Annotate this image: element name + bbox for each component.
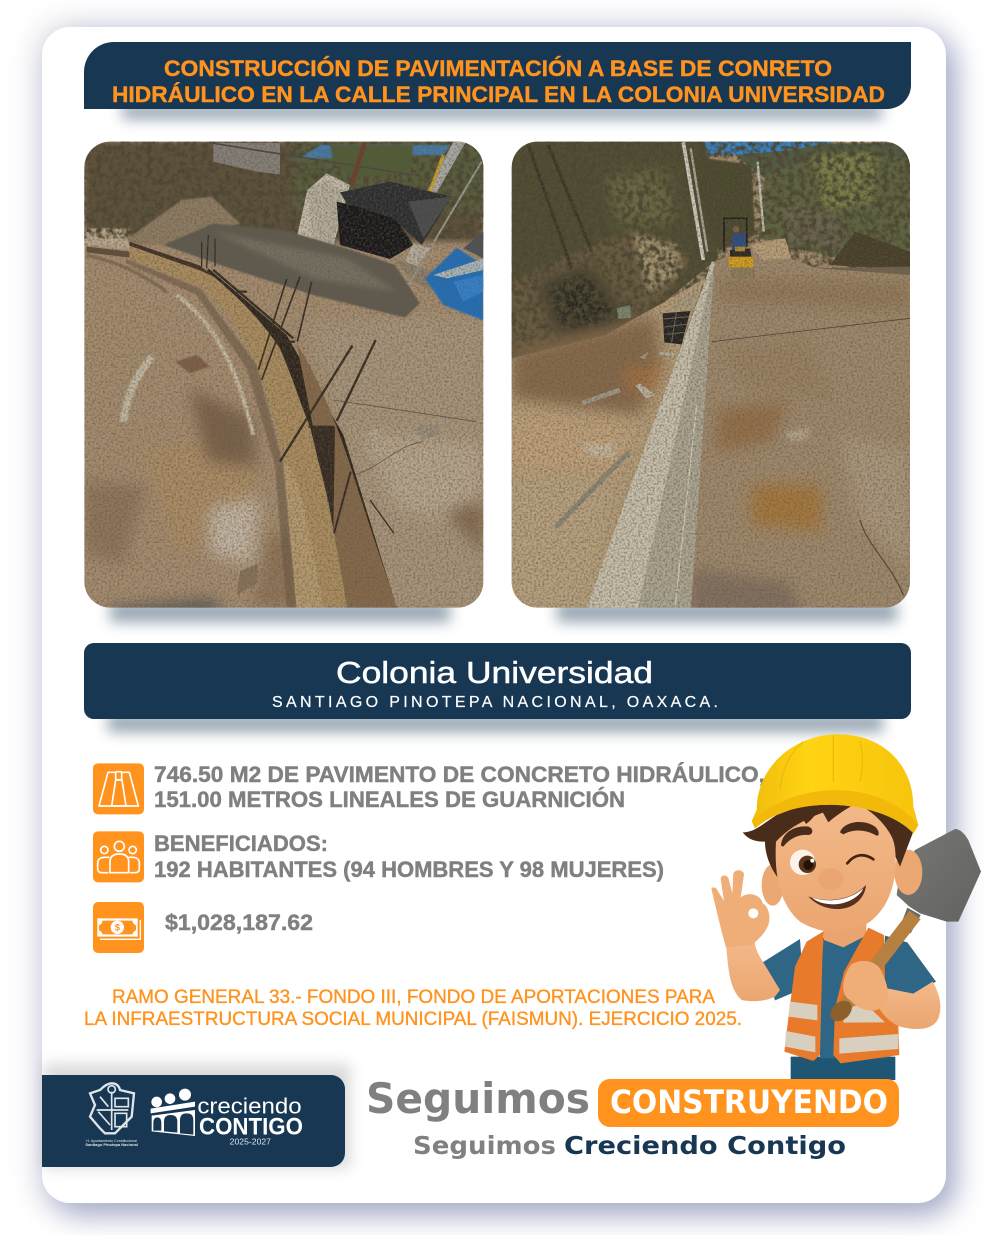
beneficiaries text (154, 831, 664, 882)
left ground (512, 278, 705, 608)
winking eye (847, 855, 873, 863)
location subtitle: SANTIAGO PINOTEPA NACIONAL, OAXACA. (272, 694, 718, 711)
slogan badge: construyendo: CONSTRUYENDO (610, 1083, 888, 1121)
front panel of form (129, 242, 347, 608)
face (776, 802, 896, 932)
footer panel shadow (44, 1064, 350, 1168)
municipal crest (85, 1083, 138, 1147)
slogan line (413, 1131, 846, 1160)
title line 1: CONSTRUCCIÓN DE PAVIMENTACIÓN A BASE DE CONRETO (164, 56, 832, 81)
title line 2: HIDRÁULICO EN LA CALLE PRINCIPAL EN LA COLONIA UNIVERSIDAD (112, 82, 885, 107)
right arm (877, 982, 940, 1029)
icon: people (93, 831, 144, 882)
sky and hills (705, 142, 832, 155)
pavement text (154, 762, 765, 812)
shirt (763, 933, 936, 1058)
municipal crest: Santiago Pinotepa Nacional (85, 1142, 138, 1147)
road roller (724, 218, 754, 279)
hand making ok sign (712, 870, 769, 948)
funding source text: RAMO GENERAL 33.- FONDO III, FONDO DE APORTACIONES PARA (112, 987, 715, 1008)
form shadow on ground (127, 259, 297, 608)
icon: road (93, 763, 144, 814)
rebars (202, 235, 477, 533)
fringe (768, 797, 893, 841)
location name: Colonia Universidad (336, 655, 653, 690)
title banner (84, 42, 911, 109)
slogan line: Creciendo Contigo (564, 1131, 846, 1160)
ears (762, 850, 922, 906)
building (213, 143, 280, 174)
road (690, 238, 910, 608)
neck (824, 918, 867, 947)
beneficiaries text: 192 HABITANTES (94 HOMBRES Y 98 MUJERES) (154, 857, 664, 882)
right trees (758, 152, 910, 263)
wood and debris (557, 453, 628, 526)
smile (808, 885, 866, 909)
left vegetation (512, 142, 718, 358)
eyebrows (781, 822, 879, 847)
slogan line: Seguimos (413, 1131, 556, 1160)
dark tarp (337, 202, 413, 259)
stacked metal boxes (663, 311, 690, 344)
hair back (743, 798, 913, 878)
curb (638, 262, 715, 608)
location band (84, 643, 911, 719)
trousers (791, 1057, 895, 1080)
photo shadows (110, 602, 897, 622)
illustration: boy construction worker (712, 734, 981, 1080)
creciendo contigo logo: CONTIGO (199, 1114, 303, 1141)
shovel handle (826, 915, 915, 1025)
creciendo contigo logo: creciendo (197, 1093, 302, 1118)
open eye (790, 850, 816, 875)
funding source text (84, 987, 742, 1030)
blue tarp (425, 248, 483, 320)
location band shadow (108, 714, 883, 732)
creciendo contigo logo: 2025-2027 (230, 1138, 272, 1147)
tree background (84, 142, 483, 242)
shovel (897, 829, 981, 933)
footer logo panel (42, 1075, 345, 1167)
sand pile (126, 197, 240, 247)
gravel pile (163, 223, 420, 318)
left arm (726, 942, 780, 1001)
rocks (417, 424, 440, 438)
right bank (830, 232, 910, 268)
utility poles (683, 142, 910, 595)
gripping hand (843, 961, 888, 1011)
icon: money: $ (115, 923, 121, 933)
investment amount: $1,028,187.62 (165, 910, 313, 935)
safety vest (784, 928, 899, 1063)
funding source text: LA INFRAESTRUCTURA SOCIAL MUNICIPAL (FAISMUN). EJERCICIO 2025. (84, 1009, 742, 1030)
photo: curved wooden formwork and gravel (84, 142, 483, 618)
municipal crest: H. Ayuntamiento Constitucional (86, 1139, 137, 1143)
back panel of form (203, 268, 397, 608)
water tank (297, 173, 350, 246)
nose (818, 868, 843, 890)
ground tones (84, 302, 483, 618)
pavement text: 746.50 M2 DE PAVIMENTO DE CONCRETO HIDRÁULICO, (154, 762, 765, 787)
tree trunks (528, 145, 592, 268)
pale ruts (87, 255, 253, 435)
helmet (752, 734, 918, 833)
beneficiaries text: BENEFICIADOS: (154, 831, 328, 856)
photo: concrete curb and roller (512, 142, 910, 618)
creciendo contigo logo (151, 1089, 303, 1147)
pavement text: 151.00 METROS LINEALES DE GUARNICIÓN (154, 787, 625, 812)
sky (300, 145, 450, 158)
icon: money (93, 902, 144, 953)
slogan word: Seguimos: Seguimos (366, 1074, 590, 1123)
header shadow (122, 104, 882, 119)
